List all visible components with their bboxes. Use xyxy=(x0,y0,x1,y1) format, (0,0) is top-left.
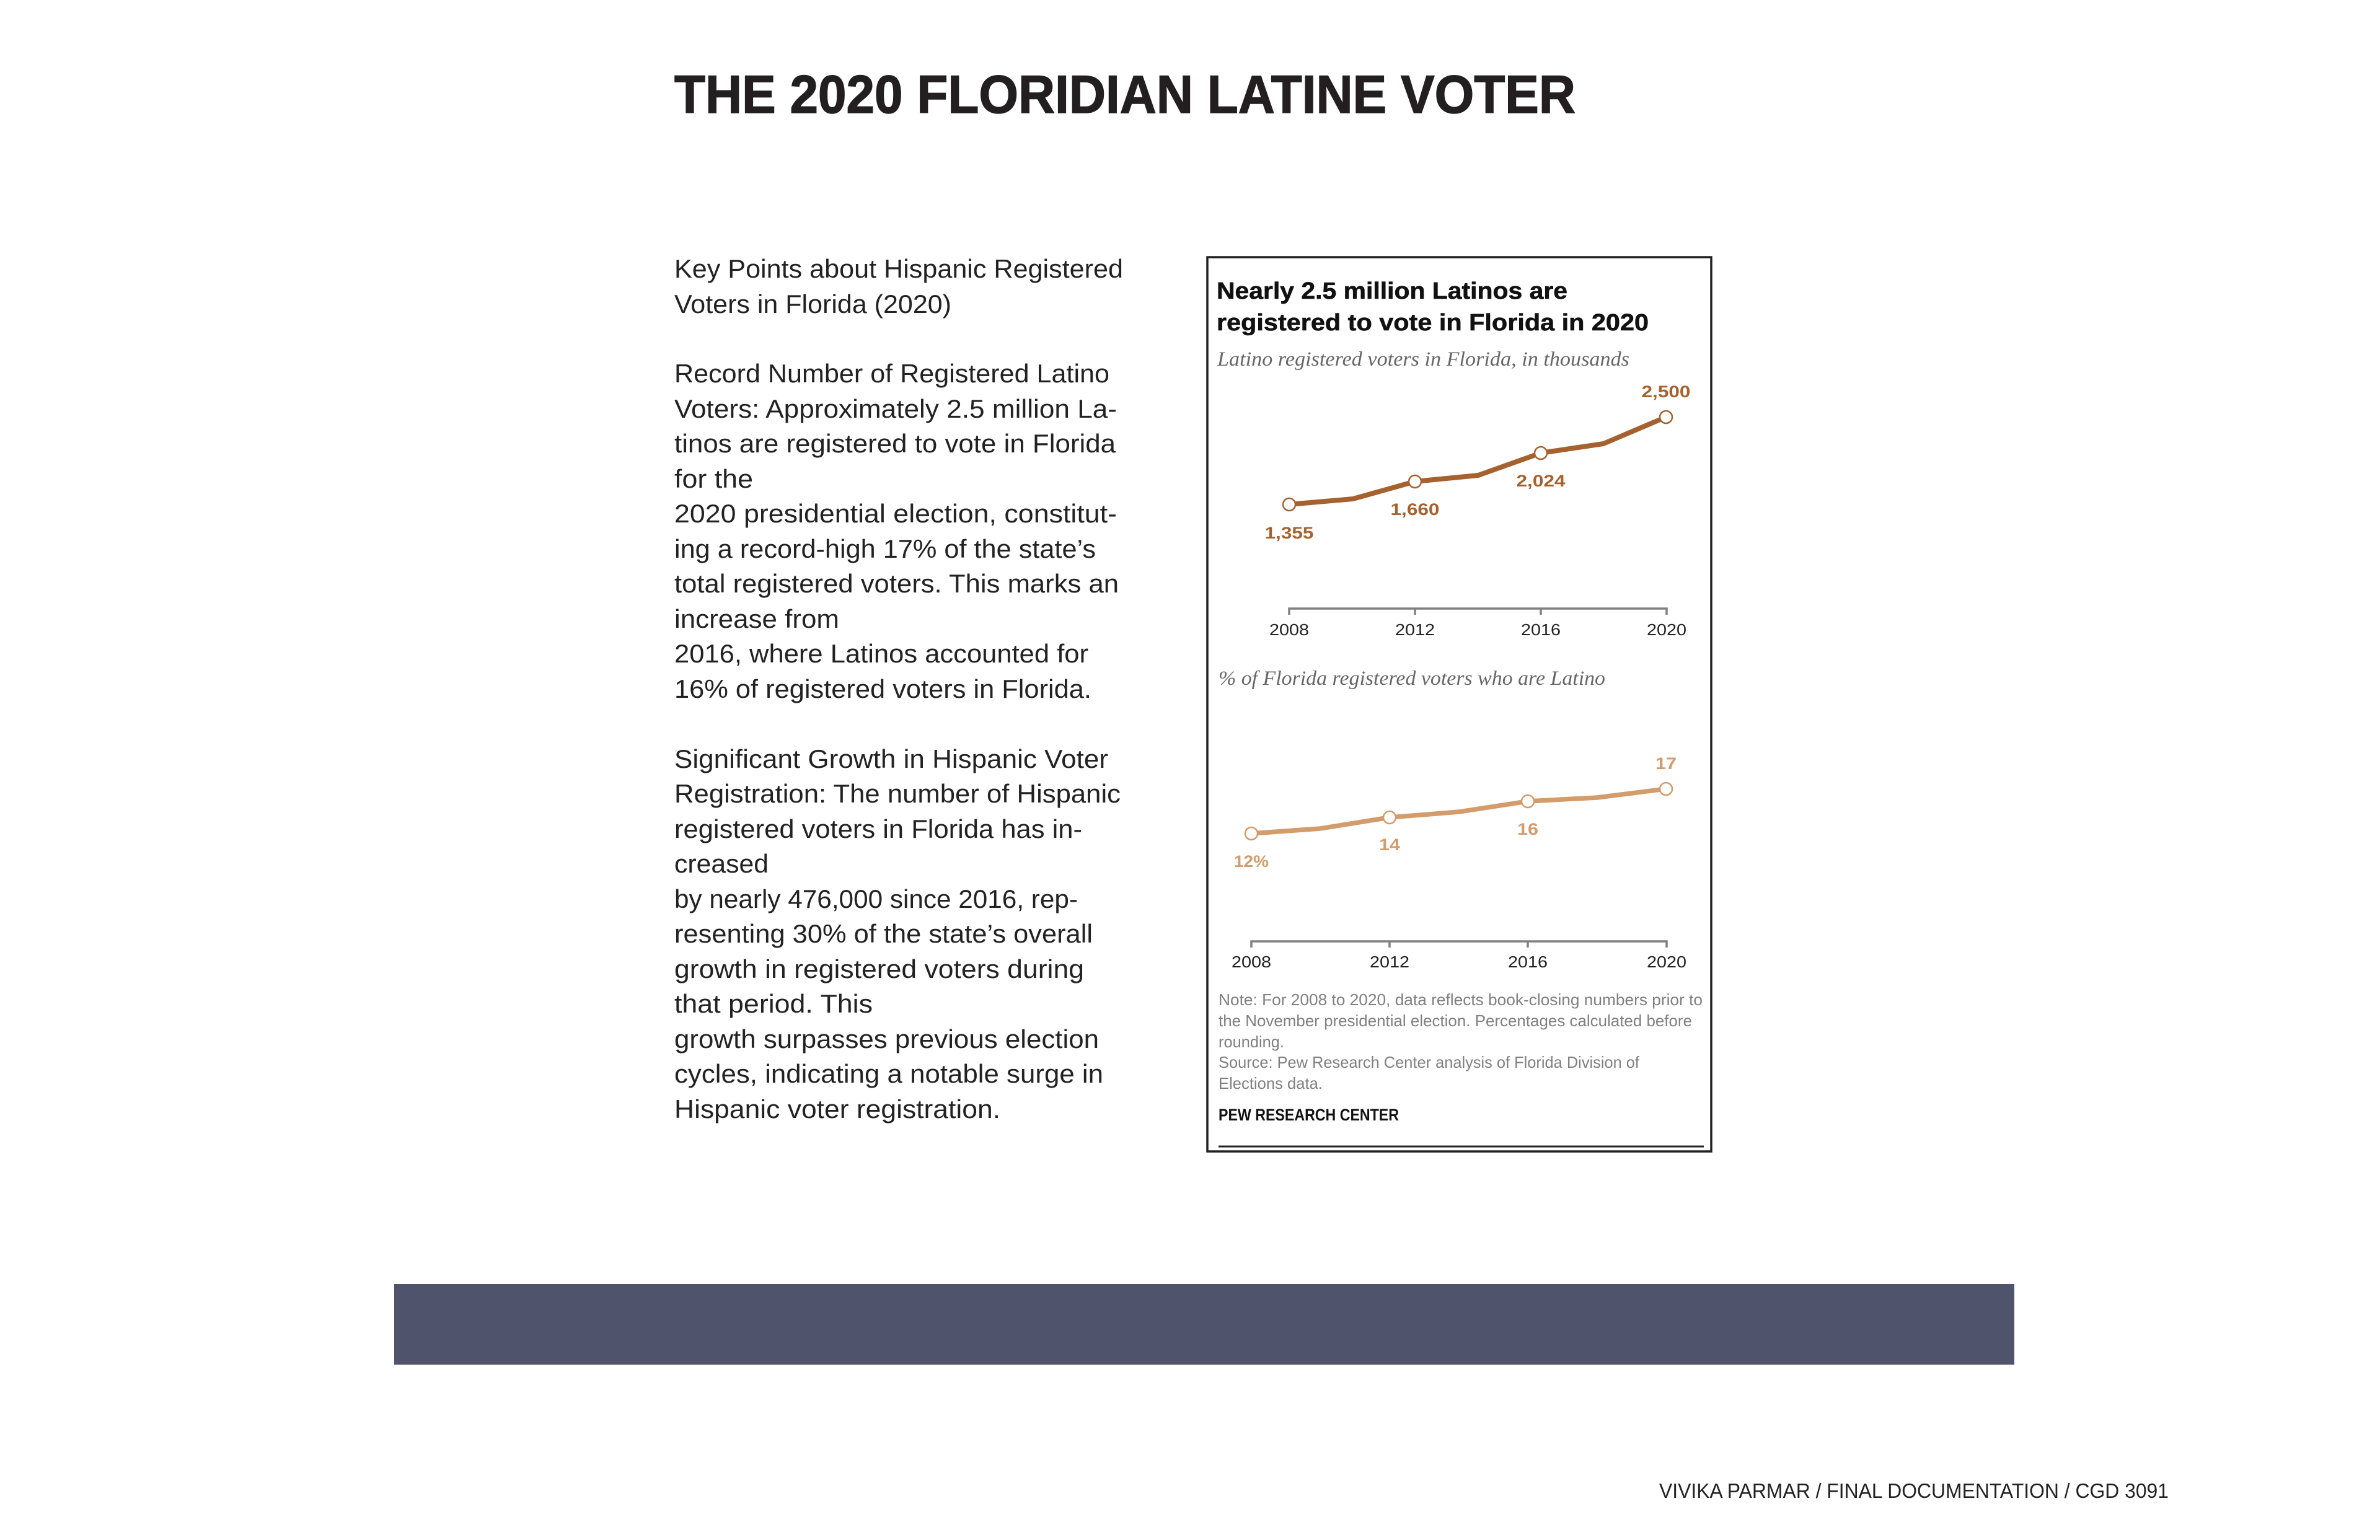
footer credit: VIVIKA PARMAR / FINAL DOCUMENTATION / CGD 3091 xyxy=(1659,1479,2169,1502)
paragraph: significant growth in Hispanic voter registration: growth surpasses previous election xyxy=(674,1024,1099,1054)
note and source: Source: Pew Research Center analysis of Florida Division of xyxy=(1219,1053,1640,1071)
line chart: Latino registered voters: 2008 xyxy=(1269,620,1309,639)
paragraph: significant growth in Hispanic voter registration: Registration: The number of Hispanic xyxy=(674,779,1121,808)
line chart: Latino registered voters: 2016 xyxy=(1521,620,1561,639)
credit: Pew Research Center: PEW RESEARCH CENTER xyxy=(1219,1106,1399,1124)
line chart: percent of registered voters who are Latino: 2012 xyxy=(1370,953,1409,971)
key points heading: Key Points about Hispanic Registered xyxy=(674,254,1123,283)
line chart: percent of registered voters who are Latino: 12% xyxy=(1234,852,1269,871)
paragraph: record number of registered Latino voters: Record Number of Registered Latino xyxy=(674,359,1109,388)
paragraph: significant growth in Hispanic voter registration: resenting 30% of the state’s overall xyxy=(674,919,1093,948)
paragraph: record number of registered Latino voters xyxy=(674,359,1119,703)
paragraph: significant growth in Hispanic voter registration: registered voters in Florida has in- xyxy=(674,814,1082,843)
text block: key points xyxy=(674,254,1123,1124)
line chart: Latino registered voters: 1,355 xyxy=(1264,524,1314,542)
chart heading: Nearly 2.5 million Latinos are xyxy=(1217,278,1567,304)
note and source: the November presidential election. Percentages calculated before xyxy=(1219,1011,1692,1030)
line chart: percent of registered voters who are Latino: 2008 xyxy=(1232,953,1271,971)
chart 2 subtitle: % of Florida registered voters who are Latino xyxy=(1219,667,1605,690)
panel: Pew Research chart xyxy=(1207,257,1711,1151)
line chart: Latino registered voters xyxy=(1264,382,1691,639)
title: THE 2020 FLORIDIAN LATINE VOTER xyxy=(674,65,1576,125)
banner bar xyxy=(394,1284,2014,1365)
paragraph: record number of registered Latino voters: increase from xyxy=(674,604,839,633)
key points heading xyxy=(674,254,1123,319)
paragraph: record number of registered Latino voters: tinos are registered to vote in Florida xyxy=(674,429,1116,458)
paragraph: significant growth in Hispanic voter registration: Hispanic voter registration. xyxy=(674,1094,1000,1124)
paragraph: significant growth in Hispanic voter registration: creased xyxy=(674,849,769,878)
paragraph: significant growth in Hispanic voter registration xyxy=(674,744,1121,1124)
paragraph: record number of registered Latino voters: 2020 presidential election, constitut- xyxy=(674,499,1117,528)
paragraph: record number of registered Latino voters: 16% of registered voters in Florida. xyxy=(674,674,1091,703)
line chart: percent of registered voters who are Latino: 14 xyxy=(1379,835,1400,854)
chart heading: registered to vote in Florida in 2020 xyxy=(1217,310,1649,336)
paragraph: record number of registered Latino voters: total registered voters. This marks an xyxy=(674,569,1119,598)
paragraph: significant growth in Hispanic voter registration: that period. This xyxy=(674,989,873,1018)
paragraph: significant growth in Hispanic voter registration: Significant Growth in Hispanic Voter xyxy=(674,744,1108,773)
paragraph: record number of registered Latino voters: Voters: Approximately 2.5 million La- xyxy=(674,394,1117,423)
line chart: Latino registered voters: 2012 xyxy=(1395,620,1435,639)
line chart: Latino registered voters: 2020 xyxy=(1647,620,1686,639)
line chart: percent of registered voters who are Latino: 2016 xyxy=(1508,953,1548,971)
chart heading xyxy=(1217,278,1649,336)
paragraph: significant growth in Hispanic voter registration: cycles, indicating a notable surge in xyxy=(674,1059,1103,1088)
note and source: Elections data. xyxy=(1219,1074,1323,1093)
panel border xyxy=(1207,257,1711,1151)
line chart: Latino registered voters: 2,500 xyxy=(1641,382,1691,401)
line chart: percent of registered voters who are Latino: 17 xyxy=(1655,754,1677,773)
line chart: percent of registered voters who are Latino: 2020 xyxy=(1647,953,1686,971)
line chart: percent of registered voters who are Latino xyxy=(1232,754,1686,971)
paragraph: record number of registered Latino voters: ing a record-high 17% of the state’s xyxy=(674,534,1096,563)
line chart: Latino registered voters: 2,024 xyxy=(1516,472,1566,490)
paragraph: significant growth in Hispanic voter registration: growth in registered voters during xyxy=(674,954,1084,983)
paragraph: significant growth in Hispanic voter registration: by nearly 476,000 since 2016, rep- xyxy=(674,884,1078,913)
paragraph: record number of registered Latino voters: 2016, where Latinos accounted for xyxy=(674,639,1088,668)
line chart: percent of registered voters who are Latino: 16 xyxy=(1517,820,1538,838)
key points heading: Voters in Florida (2020) xyxy=(674,289,951,319)
note and source: rounding. xyxy=(1219,1032,1284,1051)
note and source xyxy=(1219,990,1703,1093)
line chart: Latino registered voters: 1,660 xyxy=(1391,500,1439,519)
note and source: Note: For 2008 to 2020, data reflects book-closing numbers prior to xyxy=(1219,990,1703,1009)
paragraph: record number of registered Latino voters: for the xyxy=(674,464,753,493)
chart 1 subtitle: Latino registered voters in Florida, in thousands xyxy=(1217,348,1629,371)
